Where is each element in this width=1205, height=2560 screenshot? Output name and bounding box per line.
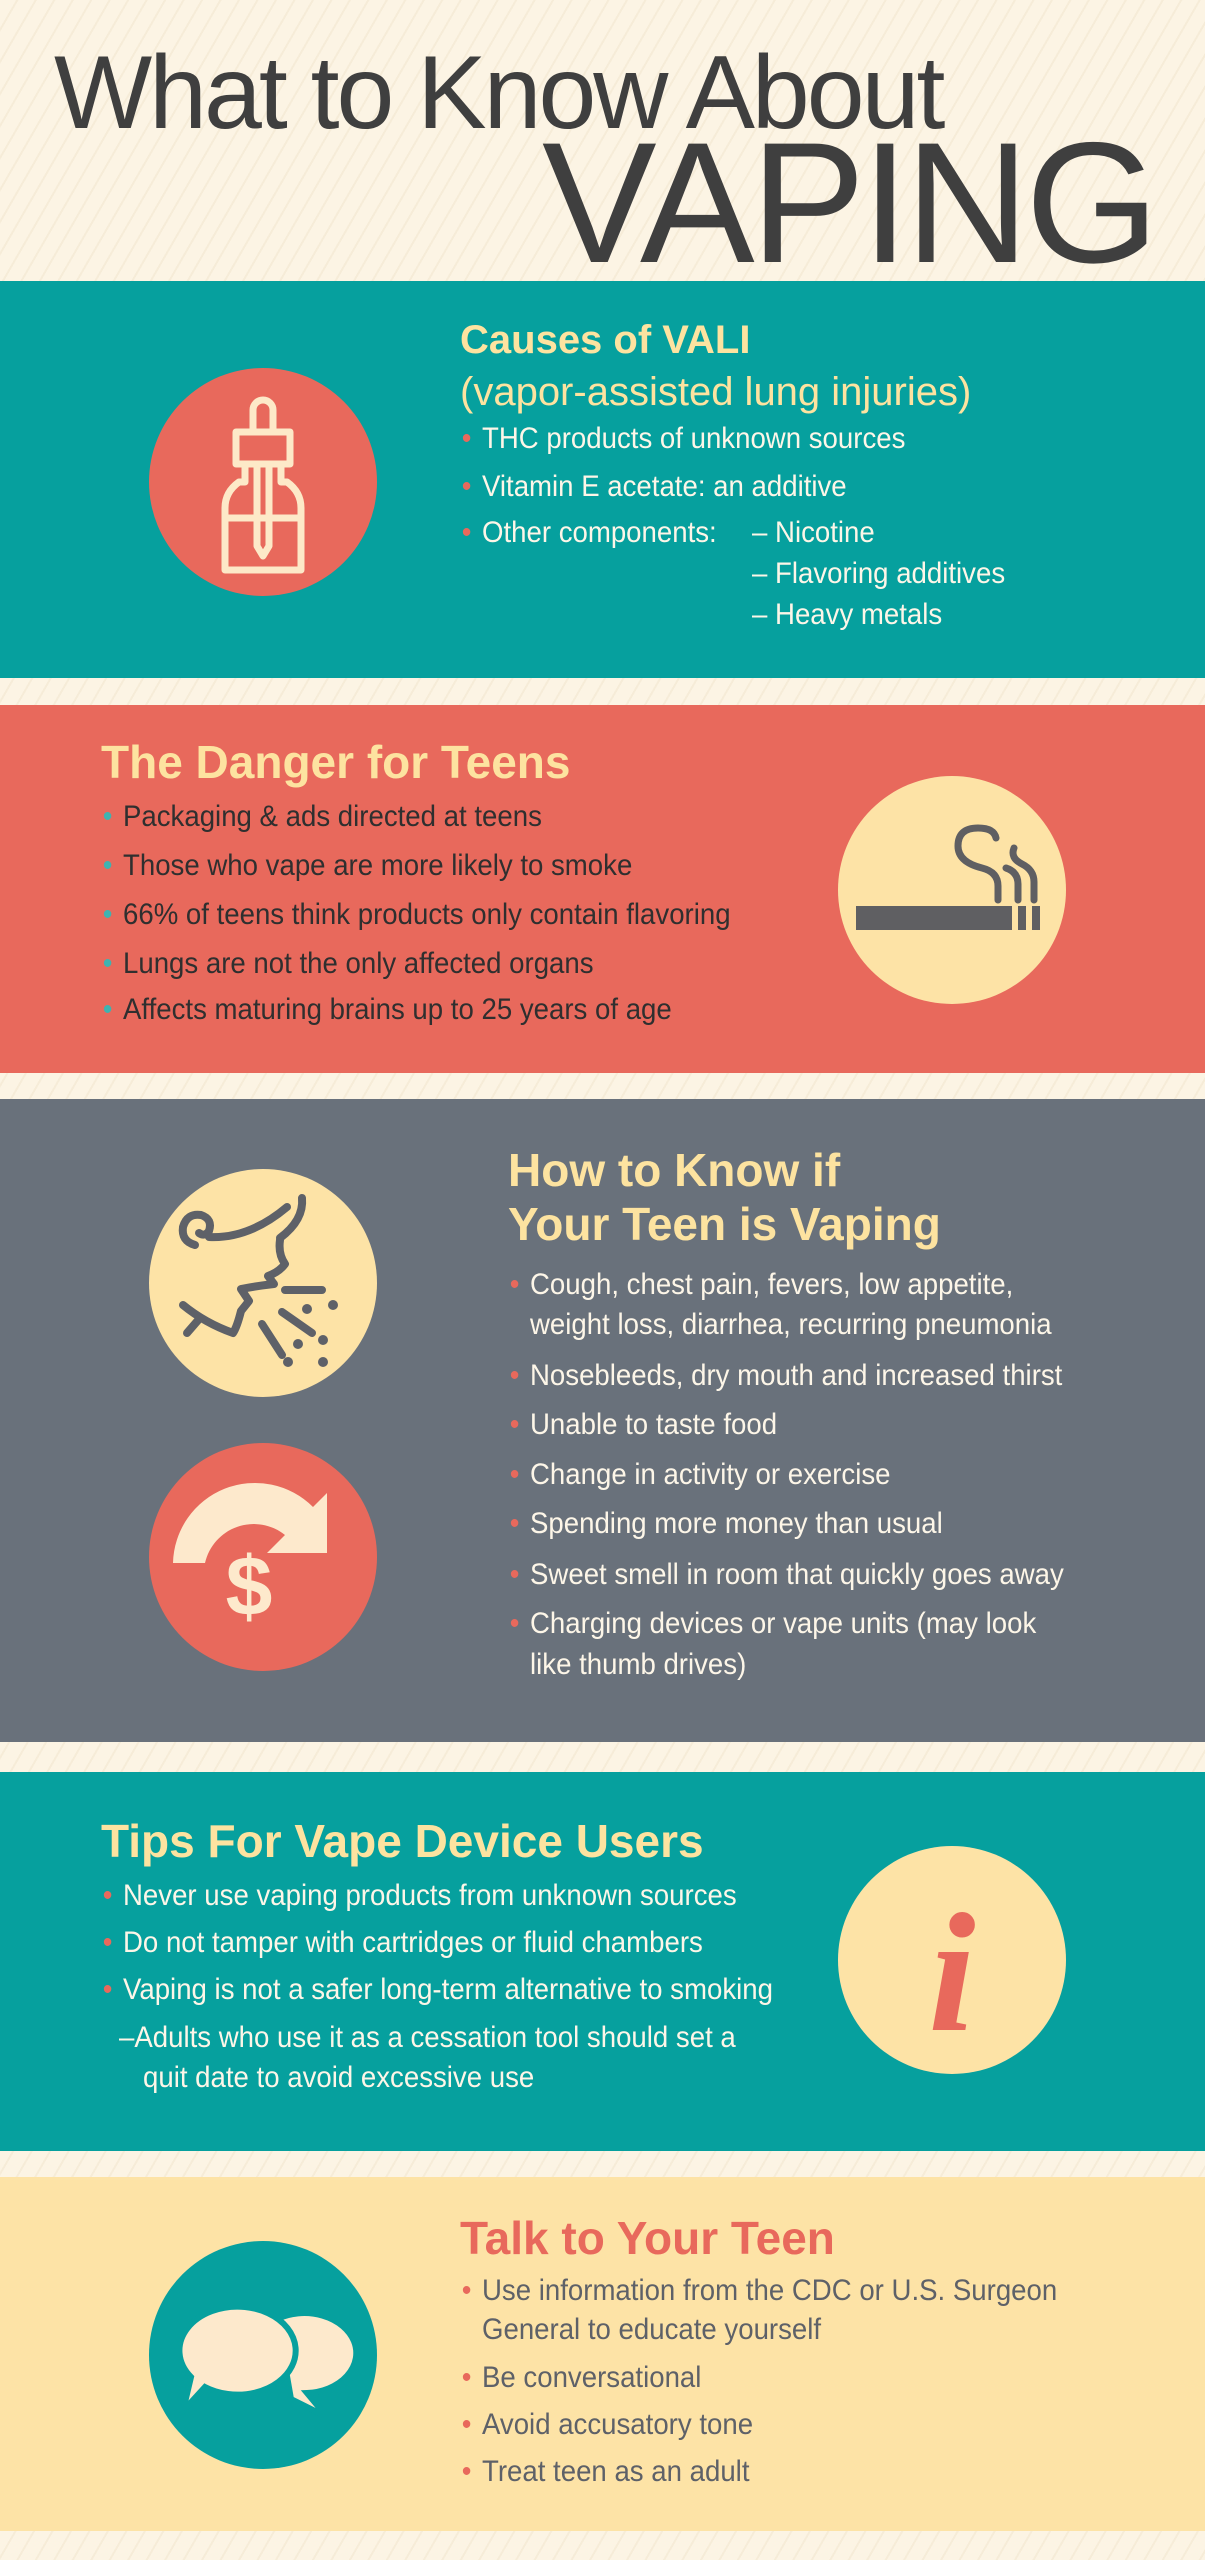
bullet list: Change in activity or exercise xyxy=(530,1458,891,1491)
bullet list: Sweet smell in room that quickly goes away xyxy=(530,1558,1064,1591)
bullet list: Nosebleeds, dry mouth and increased thirst xyxy=(530,1359,1062,1392)
bullet list: Treat teen as an adult xyxy=(482,2455,749,2488)
bullet list: Cough, chest pain, fevers, low appetite, xyxy=(530,1268,1013,1301)
heading: Tips For Vape Device Users xyxy=(101,1815,704,1867)
bullet list: – Flavoring additives xyxy=(752,557,1005,590)
icon: money arrow xyxy=(149,1443,377,1671)
bullet list: Charging devices or vape units (may look xyxy=(530,1607,1036,1640)
icon: coughing face xyxy=(149,1169,377,1397)
bullet list: General to educate yourself xyxy=(482,2313,821,2346)
panel: tips for vape device users xyxy=(0,1772,1205,2151)
icon: cigarette xyxy=(838,776,1066,1004)
bullet list: Vitamin E acetate: an additive xyxy=(482,470,847,503)
bullet list: Be conversational xyxy=(482,2361,701,2394)
bullet list xyxy=(104,800,731,1026)
panel: danger for teens xyxy=(0,705,1205,1073)
heading: Causes of VALI xyxy=(460,318,750,362)
heading: Your Teen is Vaping xyxy=(508,1198,941,1250)
bullet list: Those who vape are more likely to smoke xyxy=(123,849,632,882)
title xyxy=(54,35,1155,299)
bullet list xyxy=(510,1268,1064,1681)
bullet list: weight loss, diarrhea, recurring pneumonia xyxy=(530,1308,1052,1341)
bullet list: Never use vaping products from unknown sources xyxy=(123,1879,737,1912)
heading: How to Know if xyxy=(508,1144,840,1196)
bullet list: 66% of teens think products only contain flavoring xyxy=(123,898,731,931)
icon: dropper bottle xyxy=(149,368,377,596)
bullet list: like thumb drives) xyxy=(530,1648,746,1681)
icon: info: i xyxy=(928,1879,976,2067)
subheading: (vapor-assisted lung injuries) xyxy=(460,370,971,414)
bullet list: Other components: xyxy=(482,516,717,549)
heading xyxy=(508,1144,941,1250)
bullet list: Packaging & ads directed at teens xyxy=(123,800,542,833)
panel: causes of VALI xyxy=(0,281,1205,678)
heading: Talk to Your Teen xyxy=(460,2212,835,2264)
icon: info xyxy=(838,1846,1066,2074)
panel: how to know if your teen is vaping xyxy=(0,1099,1205,1742)
bullet list: –Adults who use it as a cessation tool should set a xyxy=(119,2021,736,2054)
bullet list: Vaping is not a safer long-term alternative to smoking xyxy=(123,1973,773,2006)
bullet list: Do not tamper with cartridges or fluid chambers xyxy=(123,1926,703,1959)
bullet list: Use information from the CDC or U.S. Surgeon xyxy=(482,2274,1057,2307)
bullet list: – Heavy metals xyxy=(752,598,942,631)
bullet list xyxy=(104,1879,773,2094)
bullet list: Unable to taste food xyxy=(530,1408,777,1441)
bullet list: quit date to avoid excessive use xyxy=(143,2061,534,2094)
panel: talk to your teen xyxy=(0,2177,1205,2531)
bullet list: – Nicotine xyxy=(752,516,875,549)
icon: money arrow: $ xyxy=(226,1539,272,1633)
title: VAPING xyxy=(542,107,1155,299)
bullet list xyxy=(462,422,1005,631)
bullet list: Lungs are not the only affected organs xyxy=(123,947,594,980)
icon: chat bubbles xyxy=(149,2241,377,2469)
bullet list: THC products of unknown sources xyxy=(482,422,905,455)
title: What to Know About xyxy=(54,35,942,151)
bullet list: Spending more money than usual xyxy=(530,1507,943,1540)
bullet list: Avoid accusatory tone xyxy=(482,2408,753,2441)
bullet list: Affects maturing brains up to 25 years of age xyxy=(123,993,672,1026)
bullet list xyxy=(462,2274,1057,2488)
heading: The Danger for Teens xyxy=(101,736,570,788)
